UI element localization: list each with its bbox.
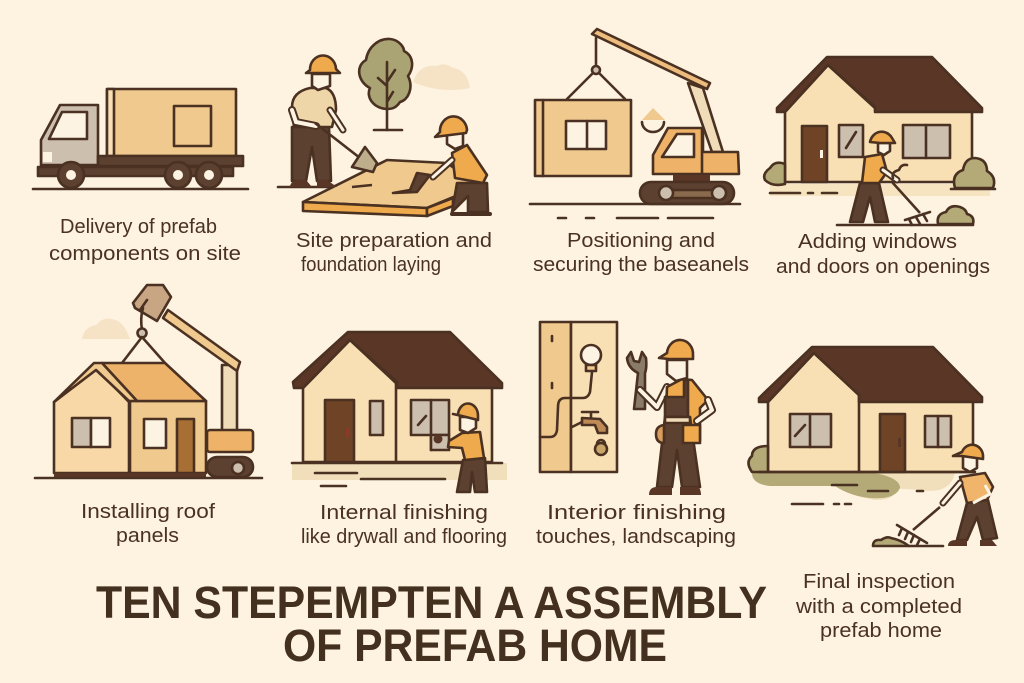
illustration: windows and doors bbox=[764, 57, 995, 225]
caption: roof panels: Installing roof bbox=[81, 501, 215, 523]
illustration: internal finishing bbox=[292, 332, 507, 492]
caption: interior finishing: Interior finishing bbox=[547, 502, 726, 524]
caption: adding windows: Adding windows bbox=[798, 231, 957, 253]
caption: adding windows bbox=[776, 231, 990, 278]
title: OF PREFAB HOME bbox=[283, 620, 667, 671]
caption: internal finishing bbox=[301, 502, 507, 548]
illustration: roof panels crane bbox=[35, 285, 262, 478]
caption: final inspection: with a completed bbox=[795, 596, 962, 618]
caption: positioning: Positioning and bbox=[567, 230, 715, 252]
caption: delivery bbox=[49, 216, 241, 265]
illustration: completed home bbox=[748, 347, 997, 546]
illustration: delivery truck bbox=[33, 89, 248, 189]
caption: internal finishing: like drywall and flooring bbox=[301, 526, 507, 548]
caption: site preparation: foundation laying bbox=[301, 254, 441, 276]
caption: internal finishing: Internal finishing bbox=[320, 502, 488, 524]
caption: roof panels bbox=[81, 501, 215, 547]
illustration: site preparation bbox=[278, 39, 490, 216]
caption: delivery: components on site bbox=[49, 243, 241, 265]
title bbox=[96, 577, 767, 671]
caption: roof panels: panels bbox=[116, 525, 179, 547]
caption: interior finishing: touches, landscaping bbox=[536, 526, 736, 548]
caption: site preparation: Site preparation and bbox=[296, 230, 492, 252]
illustration: crane positioning bbox=[530, 29, 740, 218]
caption: site preparation bbox=[296, 230, 492, 276]
caption: delivery: Delivery of prefab bbox=[60, 216, 217, 238]
caption: final inspection bbox=[795, 571, 962, 642]
caption: final inspection: Final inspection bbox=[803, 571, 955, 593]
caption: positioning bbox=[533, 230, 749, 276]
caption: final inspection: prefab home bbox=[820, 620, 942, 642]
title: TEN STEPEMPTEN A ASSEMBLY bbox=[96, 577, 767, 628]
caption: positioning: securing the baseanels bbox=[533, 254, 749, 276]
illustration: interior finishing worker bbox=[540, 322, 712, 495]
caption: interior finishing bbox=[536, 502, 736, 548]
caption: adding windows: and doors on openings bbox=[776, 256, 990, 278]
